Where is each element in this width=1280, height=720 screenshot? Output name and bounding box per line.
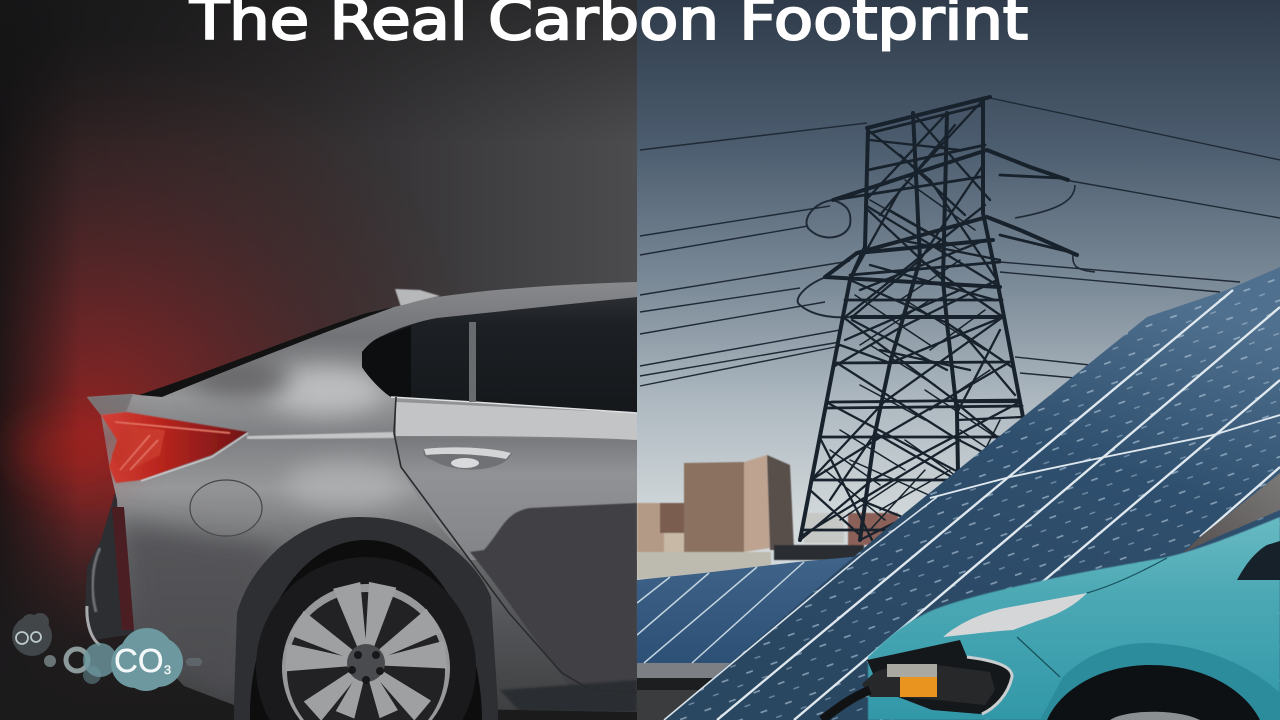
charging port [867, 640, 1013, 714]
pylon [800, 97, 1077, 540]
main solar array [664, 267, 1280, 720]
rear solar panels [637, 556, 862, 720]
door handle [423, 447, 512, 470]
dark red-glow backdrop [0, 0, 637, 720]
body shading [120, 360, 637, 712]
tail light [87, 394, 248, 483]
windshield [1183, 473, 1280, 553]
side windows [362, 297, 637, 413]
sky [637, 0, 1280, 580]
headlight [943, 593, 1087, 637]
body shell [87, 282, 637, 712]
door shut line [394, 397, 637, 692]
hood crease [1017, 558, 1167, 677]
secondary members [803, 105, 1070, 530]
power wires [640, 98, 1280, 386]
grey car [85, 282, 637, 720]
fender arch band [1040, 643, 1280, 720]
main legs and arms [800, 97, 1077, 540]
rear bumper [85, 490, 134, 640]
tail light glow [10, 420, 130, 480]
charging plug [862, 664, 995, 705]
CO2 exhaust cloud [12, 613, 202, 691]
shark fin antenna [395, 289, 440, 307]
panel: electric side [637, 0, 1280, 720]
charging cable [822, 690, 870, 720]
power plant buildings [637, 455, 898, 579]
teal electric car [822, 473, 1280, 720]
spoiler strip [139, 307, 394, 397]
wheel [1047, 665, 1260, 720]
panel: petrol car side [0, 0, 637, 720]
door panel [407, 478, 637, 560]
fuel door [190, 480, 262, 536]
cross bracing [800, 100, 1037, 540]
rear wheel [234, 517, 498, 720]
side window [1237, 541, 1280, 580]
ground [637, 663, 737, 678]
red tail band [112, 507, 134, 630]
CO2 label: CO₃ [114, 642, 172, 679]
